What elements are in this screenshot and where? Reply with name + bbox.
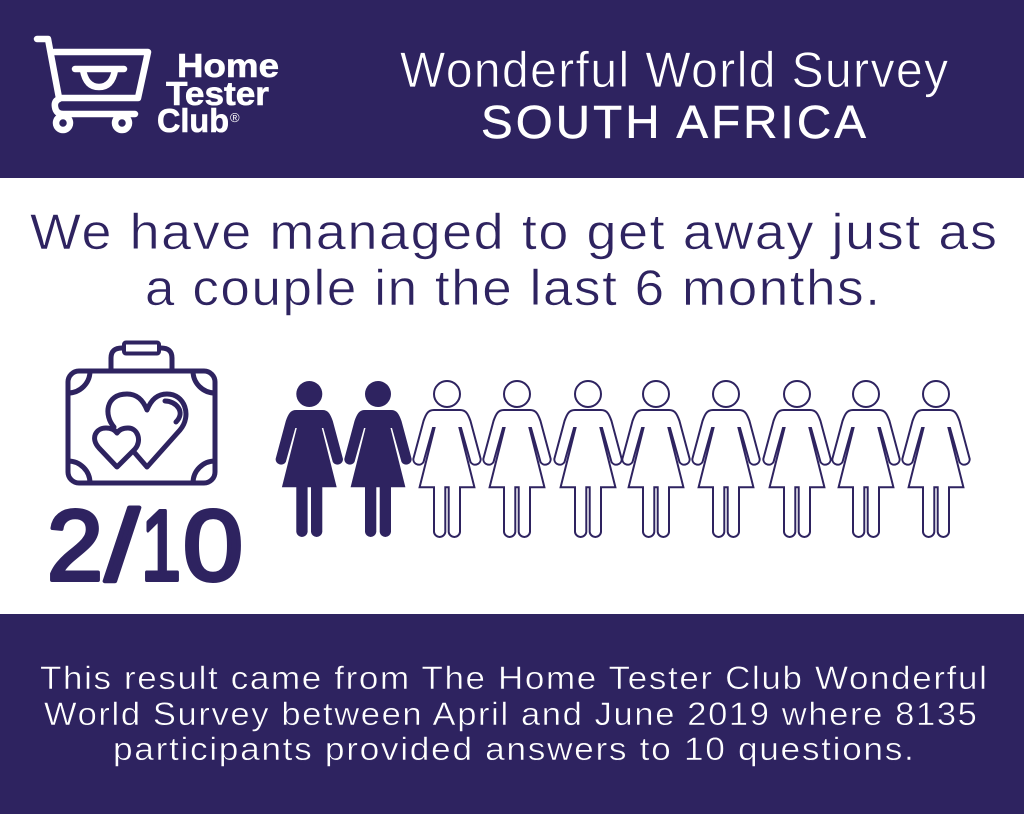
logo wordmark: Club — [157, 102, 229, 139]
logo wordmark: Home — [177, 47, 279, 84]
footer text: This result came from The Home Tester Club Wonderful — [40, 660, 989, 696]
score: 2/10: 1 — [141, 490, 181, 602]
title line 2: SOUTH AFRICA — [481, 96, 869, 148]
outline figure 6 — [622, 381, 690, 537]
statement heading — [30, 204, 998, 316]
footer panel — [0, 614, 1024, 814]
title line 1: Wonderful World Survey — [400, 42, 950, 98]
statement heading: a couple in the last 6 months. — [145, 260, 882, 316]
registered mark: ® — [230, 110, 240, 125]
statement heading: We have managed to get away just as — [30, 204, 998, 260]
score: 2/10: 2 — [47, 490, 103, 602]
icon: suitcase with hearts — [68, 342, 215, 483]
footer text: participants provided answers to 10 questions. — [113, 731, 916, 767]
outline figure 10 — [902, 381, 970, 537]
outline figure 8 — [763, 381, 831, 537]
title — [400, 42, 950, 148]
pictogram: 2 of 10 women filled — [276, 381, 970, 537]
outline figure 3 — [413, 381, 481, 537]
outline figure 9 — [832, 381, 900, 537]
filled figure 1 — [276, 381, 343, 537]
outline figure 4 — [483, 381, 551, 537]
footer text — [40, 660, 989, 767]
outline figure 5 — [554, 381, 622, 537]
filled figure 2 — [344, 381, 412, 537]
logo: Home Tester Club — [37, 39, 279, 139]
header panel — [0, 0, 1024, 178]
logo wordmark — [157, 47, 279, 139]
score: 2/10 — [47, 490, 243, 602]
logo wordmark: Tester — [166, 75, 269, 112]
score: 2/10: / — [105, 490, 139, 602]
icon: shopping cart — [37, 39, 148, 130]
outline figure 7 — [692, 381, 760, 537]
score: 2/10: 0 — [183, 490, 243, 602]
footer text: World Survey between April and June 2019 where 8135 — [44, 696, 978, 732]
